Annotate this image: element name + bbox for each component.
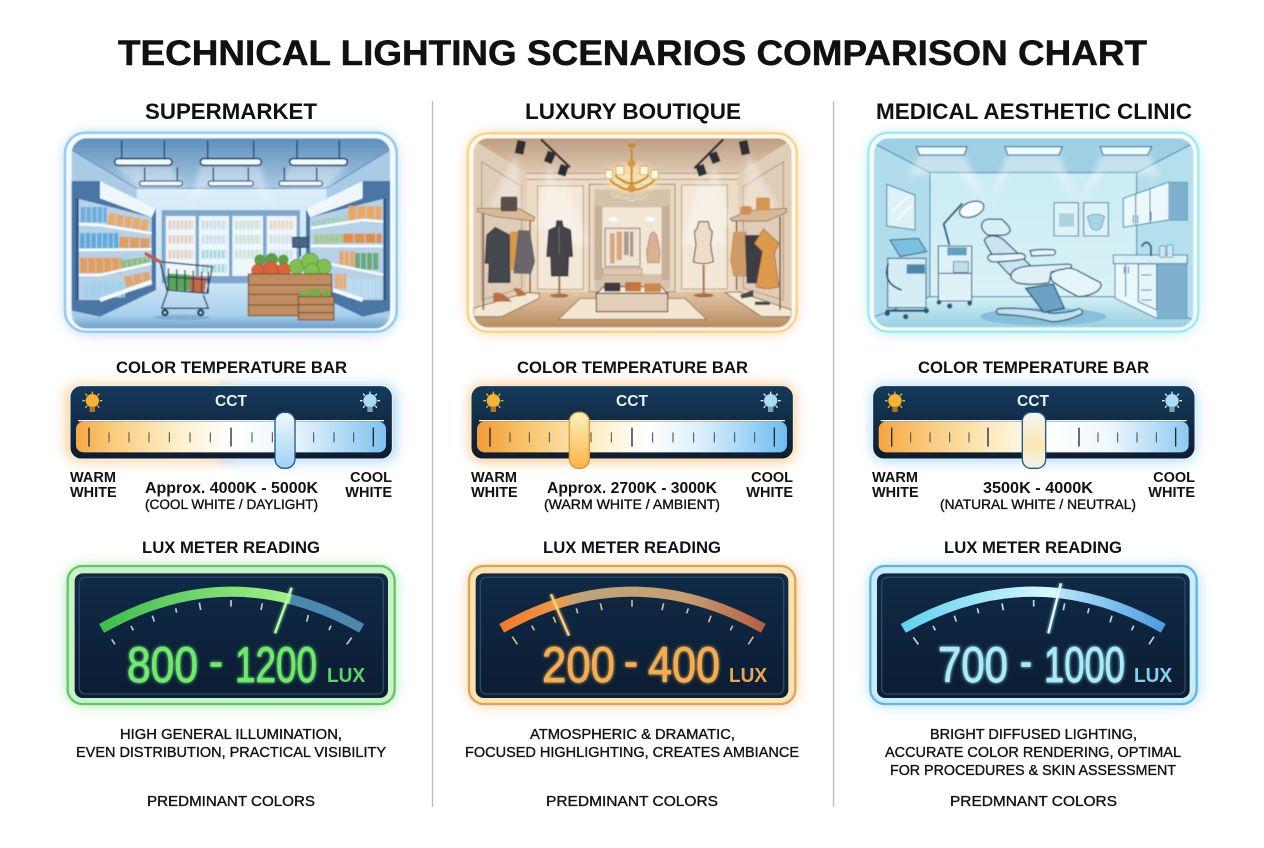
label: CCT: CCT xyxy=(616,393,648,410)
track lights xyxy=(541,139,723,168)
description: ACCURATE COLOR RENDERING, OPTIMAL xyxy=(885,745,1181,761)
label: color temperature bar heading: COLOR TEMPERATURE BAR xyxy=(918,358,1149,377)
right rack xyxy=(725,292,792,317)
ceiling lights xyxy=(122,141,339,182)
machine one xyxy=(888,258,926,308)
icon: warm bulb xyxy=(885,392,905,412)
warm white label: WHITE xyxy=(471,485,518,501)
digital reading xyxy=(938,633,1125,693)
description: HIGH GENERAL ILLUMINATION, xyxy=(120,727,342,743)
warm white label: WARM xyxy=(471,470,517,486)
label: lux meter heading: LUX METER READING xyxy=(543,538,721,557)
digital reading: 700 xyxy=(938,637,1008,693)
rug and table xyxy=(558,298,707,319)
cool white label: WHITE xyxy=(746,485,793,501)
CCT bar xyxy=(471,386,793,468)
description: EVEN DISTRIBUTION, PRACTICAL VISIBILITY xyxy=(76,745,386,761)
CCT range value: 3500K - 4000K xyxy=(983,480,1094,497)
illustration: boutique interior xyxy=(468,133,797,333)
CCT range value: Approx. 4000K - 5000K xyxy=(145,480,319,497)
sink counter xyxy=(1115,262,1187,318)
produce crate xyxy=(293,237,308,247)
digital reading: 1000 xyxy=(1044,637,1125,693)
label: CCT: CCT xyxy=(215,393,247,410)
digital reading: 1200 xyxy=(235,637,317,693)
cool white label: COOL xyxy=(751,470,793,486)
title: TECHNICAL LIGHTING SCENARIOS COMPARISON CHART xyxy=(118,34,1147,73)
CCT range description: (WARM WHITE / AMBIENT) xyxy=(544,497,720,512)
slider knob xyxy=(569,412,589,468)
digital reading: - xyxy=(624,633,638,689)
icon: cool bulb xyxy=(1162,392,1182,412)
illustration: supermarket interior xyxy=(65,133,397,333)
unit: LUX xyxy=(327,665,366,687)
beams xyxy=(116,165,347,198)
digital reading: - xyxy=(209,633,223,689)
CCT range description: (COOL WHITE / DAYLIGHT) xyxy=(145,497,318,512)
predominant colors label: PREDMNANT COLORS xyxy=(950,794,1117,810)
needle xyxy=(275,588,292,633)
digital reading: 800 xyxy=(127,637,198,693)
icon: warm bulb xyxy=(82,392,102,412)
posters xyxy=(1054,203,1078,236)
cart xyxy=(153,315,210,320)
wall cabinets xyxy=(1123,182,1187,227)
lux meter xyxy=(468,566,797,705)
description: FOCUSED HIGHLIGHTING, CREATES AMBIANCE xyxy=(465,745,799,761)
unit: LUX xyxy=(729,665,768,687)
freezer doors xyxy=(162,210,300,283)
icon: warm bulb xyxy=(483,392,503,412)
predominant colors label: PREDMINANT COLORS xyxy=(546,794,718,810)
digital reading: 400 xyxy=(648,637,720,693)
needle xyxy=(551,594,569,636)
right shelves xyxy=(306,181,390,317)
cool white label: WHITE xyxy=(1148,485,1195,501)
label: lux meter heading: LUX METER READING xyxy=(944,538,1122,557)
digital reading: 200 xyxy=(542,637,615,693)
left rack xyxy=(473,293,539,317)
predominant colors label: PREDMINANT COLORS xyxy=(147,794,315,810)
needle xyxy=(1048,583,1061,633)
lux meter xyxy=(67,566,395,705)
heading: luxury boutique: LUXURY BOUTIQUE xyxy=(525,99,741,124)
machine two and lamp xyxy=(938,246,972,301)
description: ATMOSPHERIC & DRAMATIC, xyxy=(530,727,735,743)
CCT bar xyxy=(873,386,1195,468)
panel: medical aesthetic clinic column xyxy=(868,99,1198,810)
warm white label: WARM xyxy=(70,470,116,486)
lux meter xyxy=(870,566,1198,705)
heading: supermarket: SUPERMARKET xyxy=(145,99,318,124)
CCT range description: (NATURAL WHITE / NEUTRAL) xyxy=(940,497,1136,512)
illustration: clinic treatment room xyxy=(868,133,1198,333)
warm white label: WARM xyxy=(872,470,918,486)
label: CCT: CCT xyxy=(1017,393,1049,410)
cool white label: COOL xyxy=(350,470,392,486)
description xyxy=(885,727,1181,779)
description: FOR PROCEDURES & SKIN ASSESSMENT xyxy=(890,763,1176,779)
description: BRIGHT DIFFUSED LIGHTING, xyxy=(930,727,1137,743)
cool white label: WHITE xyxy=(345,485,392,501)
icon: cool bulb xyxy=(360,392,380,412)
CCT range value: Approx. 2700K - 3000K xyxy=(547,480,718,497)
mannequin coat xyxy=(558,276,561,294)
slider knob xyxy=(1022,412,1046,468)
icon: cool bulb xyxy=(761,392,781,412)
digital reading xyxy=(542,633,720,693)
label: color temperature bar heading: COLOR TEMPERATURE BAR xyxy=(116,358,347,377)
digital reading xyxy=(127,633,317,693)
mannequin dress form xyxy=(702,264,706,294)
slider knob xyxy=(275,412,295,468)
panel: supermarket column xyxy=(65,99,397,810)
description xyxy=(465,727,799,761)
label: color temperature bar heading: COLOR TEMPERATURE BAR xyxy=(517,358,748,377)
chandelier xyxy=(605,144,658,202)
description xyxy=(76,727,386,761)
warm white label: WHITE xyxy=(872,485,919,501)
unit: LUX xyxy=(1134,665,1173,687)
treatment chair xyxy=(980,308,1107,325)
label: lux meter heading: LUX METER READING xyxy=(142,538,320,557)
spot beams xyxy=(488,153,778,245)
CCT bar xyxy=(67,386,396,468)
cool white label: COOL xyxy=(1153,470,1195,486)
warm white label: WHITE xyxy=(70,485,117,501)
light beams xyxy=(908,154,1160,198)
mirror xyxy=(887,184,915,230)
digital reading: - xyxy=(1020,633,1032,689)
left shelves xyxy=(72,181,156,317)
panel: luxury boutique column xyxy=(465,99,799,810)
heading: medical aesthetic clinic: MEDICAL AESTHETIC CLINIC xyxy=(876,99,1192,124)
